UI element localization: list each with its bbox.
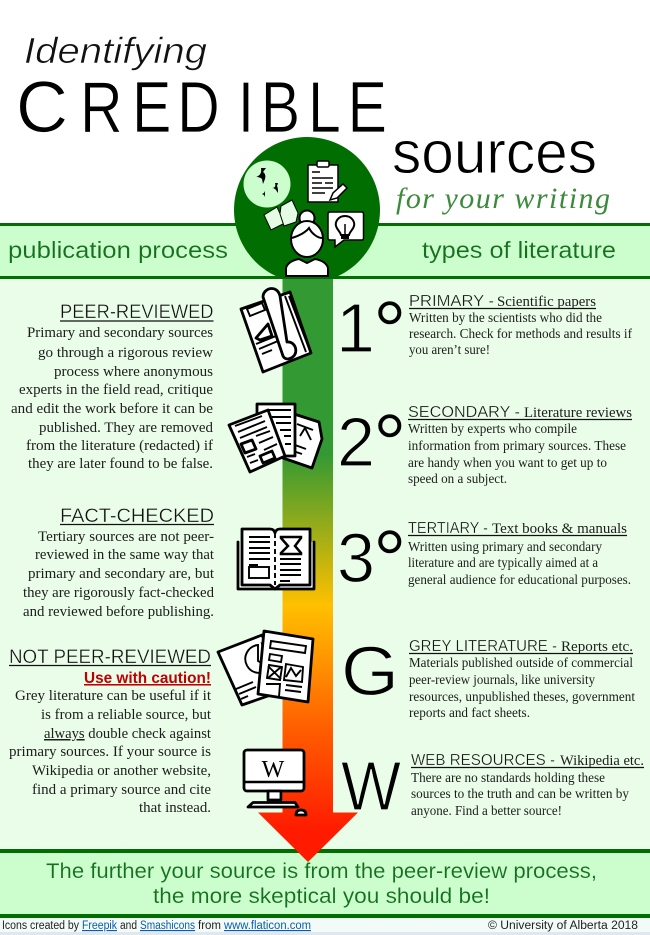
right column: secondary: Written by experts who compile [408,421,577,436]
left column: peer-reviewed: experts in the field read, critique [19,382,213,398]
numeral: tertiary: 3 [337,519,375,597]
letter: web resources: W [341,747,401,825]
bottom band: The further your source is from the peer-review process, [46,860,597,883]
gradient arrow [258,279,358,862]
icon: woman reading [286,210,328,276]
right column: tertiary: TERTIARY - [408,520,488,537]
footer: Freepik [82,920,117,932]
right column: primary [409,293,632,357]
left column: peer-reviewed: go through a rigorous review [38,345,213,361]
footer: © University of Alberta 2018 [488,920,638,932]
left column: not peer-reviewed: always double check against [44,726,212,742]
numeral: secondary: 2 [337,403,375,481]
right column: web resources: anyone. Find a better source! [411,803,562,818]
right column: primary: Scientific papers [497,294,596,310]
left column: fact-checked: primary and secondary are, but [28,566,215,582]
numeral: primary: 1 [336,289,375,367]
right column: web resources [411,752,644,818]
left column: not peer-reviewed: is from a reliable source, but [41,707,212,723]
icon: open journal [241,289,311,372]
right column: web resources: sources to the truth and can be written by [411,786,629,801]
footer: Smashicons [140,920,195,932]
left column: not peer-reviewed: primary sources. If your source is [9,744,211,760]
right column: tertiary: Written using primary and secondary [408,539,602,554]
left column: fact-checked [23,505,215,620]
right column: tertiary: general audience for educational purposes. [408,572,631,587]
right column: primary: Written by the scientists who did the [409,310,602,325]
right column: tertiary: Text books & manuals [492,521,627,537]
footer: www.flaticon.com [223,920,311,932]
header band: publication process [8,237,228,263]
right column: grey literature [409,638,635,720]
right column: tertiary [408,520,631,587]
right column: tertiary: literature and are typically aimed at a [408,555,598,570]
left column: peer-reviewed: and edit the work before it can be [11,401,213,417]
degree mark: primary: ° [373,284,407,378]
icon: birds in the sky [244,160,290,208]
header band: types of literature [422,237,616,263]
left column: not peer-reviewed: Wikipedia or another website, [32,763,211,779]
left column: not peer-reviewed: Use with caution! [84,670,211,687]
left column: not peer-reviewed: that instead. [139,800,211,816]
left column: fact-checked: FACT-CHECKED [60,505,214,527]
left column: peer-reviewed: Primary and secondary sources [27,325,213,341]
main panel background [0,279,650,850]
left column: peer-reviewed: process where anonymous [54,364,213,380]
left column: fact-checked: reviewed in the same way that [35,547,215,563]
right column: secondary: are handy when you want to get up to [408,455,607,470]
right column: grey literature: peer-review journals, like university [409,672,595,687]
left column: not peer-reviewed: Grey literature can be useful if it [15,688,212,704]
right column: secondary [408,404,632,486]
left column: peer-reviewed: they are later found to be false. [28,456,213,472]
left column: fact-checked: and reviewed before publishing. [23,604,214,620]
icon: stack of newspapers [229,404,322,472]
left column: not peer-reviewed [9,646,212,816]
right column: web resources: Wikipedia etc. [560,753,644,769]
title: C [16,68,68,148]
bottom band: the more skeptical you should be! [153,885,490,908]
footer: and [120,920,137,932]
left column: peer-reviewed [11,301,214,472]
letter: grey literature: G [341,632,399,710]
right column: grey literature: resources, unpublished theses, government [409,689,635,704]
central circle emblem [234,137,380,276]
icon: idea speech bubble [328,212,364,247]
left column: not peer-reviewed: find a primary source and cite [32,782,211,798]
right column: secondary: speed on a subject. [408,471,507,486]
right column: grey literature: reports and fact sheets. [409,705,530,720]
title [16,30,610,215]
title: for your writing [396,182,610,215]
right column: grey literature: Materials published outside of commercial [409,655,633,670]
icon: computer showing Wikipedia: W [262,757,285,783]
right column: secondary: SECONDARY - [408,404,520,421]
right column: primary: you aren’t sure! [409,342,490,357]
icon: grey literature reports [218,631,313,705]
left column: peer-reviewed: from the literature (redacted) if [26,438,213,454]
left column: peer-reviewed: published. They are removed [39,420,213,436]
bottom band [0,849,650,918]
left column: peer-reviewed: PEER-REVIEWED [60,301,214,323]
left column: fact-checked: Tertiary sources are not peer- [38,529,214,545]
title: REDIBLE [80,66,387,147]
right column: grey literature: Reports etc. [561,639,633,655]
right column: web resources: There are no standards holding these [411,770,605,785]
right column: primary: research. Check for methods and results if [409,326,632,341]
degree mark: secondary: ° [373,397,407,491]
icon: open book [238,529,314,589]
icon: clipboard and pencil [308,161,347,202]
footer: from [198,920,221,932]
icon: computer showing Wikipedia [244,750,306,815]
left column: not peer-reviewed: NOT PEER-REVIEWED [9,646,211,668]
icon: binoculars [264,200,298,230]
right column: primary: PRIMARY - [409,293,494,310]
title: sources [392,119,597,186]
left column: fact-checked: they are rigorously fact-checked [23,585,214,601]
title: Identifying [24,30,207,71]
right column: secondary: Literature reviews [524,405,632,421]
right column: secondary: information from primary sources. These [408,438,626,453]
footer: Icons created by [2,920,79,932]
footer [0,918,650,935]
header band [0,223,650,279]
degree mark: tertiary: ° [373,513,407,607]
right column: grey literature: GREY LITERATURE - [409,638,557,655]
right column: web resources: WEB RESOURCES - [411,752,555,769]
